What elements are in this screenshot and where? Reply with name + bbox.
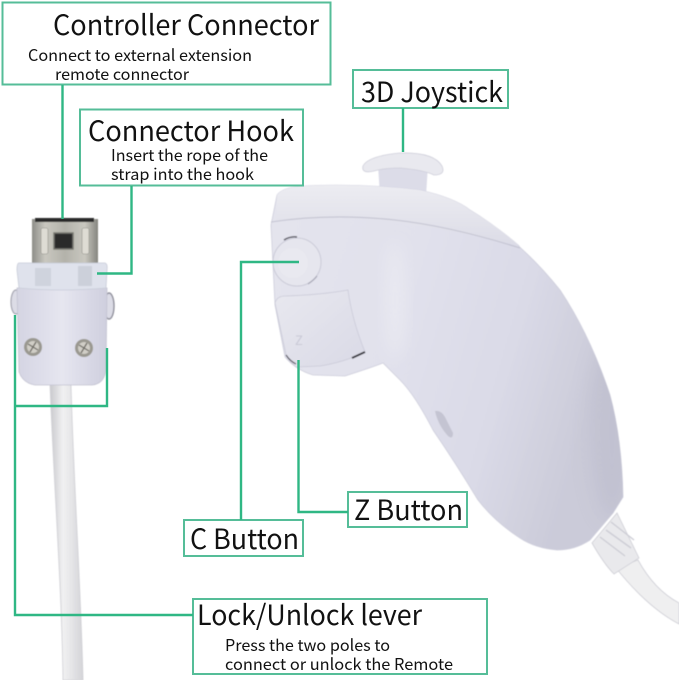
screws [24,338,93,357]
metal connector tip [32,218,98,265]
plug body [17,288,107,385]
joystick cap [363,153,443,175]
callout: Lock/Unlock lever: Press the two poles to [225,632,390,656]
illustration: connector plug and cable [11,218,114,680]
cord [616,560,679,624]
leader lines [15,85,403,615]
arrow: lock lever second pole leader [15,348,107,406]
Z button: Z [295,330,303,349]
callout: Controller Connector: Controller Connector [53,4,319,44]
arrow: lock lever leader [15,315,193,615]
C button [273,237,321,286]
callout: C Button: C Button [190,518,299,558]
side hook loops [11,290,21,314]
strain relief [592,513,639,574]
arrow: connector hook leader [97,186,132,274]
clear connector hook [17,263,107,290]
Z button [275,290,365,367]
callout: Lock/Unlock lever [193,594,487,675]
callout: Controller Connector: Connect to external extension [28,42,252,66]
soft body shading [599,380,622,498]
callout: Z Button: Z Button [354,489,463,529]
arrow: controller connector leader [61,85,64,219]
callout: Connector Hook: Insert the rope of the [111,142,268,166]
arrow: Z button leader [298,360,348,512]
callout: Controller Connector [2,2,330,85]
side slot [435,411,453,437]
callout: Connector Hook: Connector Hook [88,110,295,150]
arrow: C button leader [241,262,299,520]
callout: Connector Hook [80,110,303,186]
illustration: nunchuk controller [271,153,679,624]
main body [271,185,623,550]
arrow: joystick leader [402,108,404,152]
cable [50,384,83,680]
callout: Lock/Unlock lever: Lock/Unlock lever [197,594,422,634]
callout: Lock/Unlock lever: connect or unlock the Remote [225,651,453,675]
callout: 3D Joystick: 3D Joystick [361,71,504,111]
callout: Connector Hook: strap into the hook [111,161,254,185]
joystick stem [378,165,428,196]
body top cap [276,185,520,246]
callout: Controller Connector: remote connector [55,61,190,85]
